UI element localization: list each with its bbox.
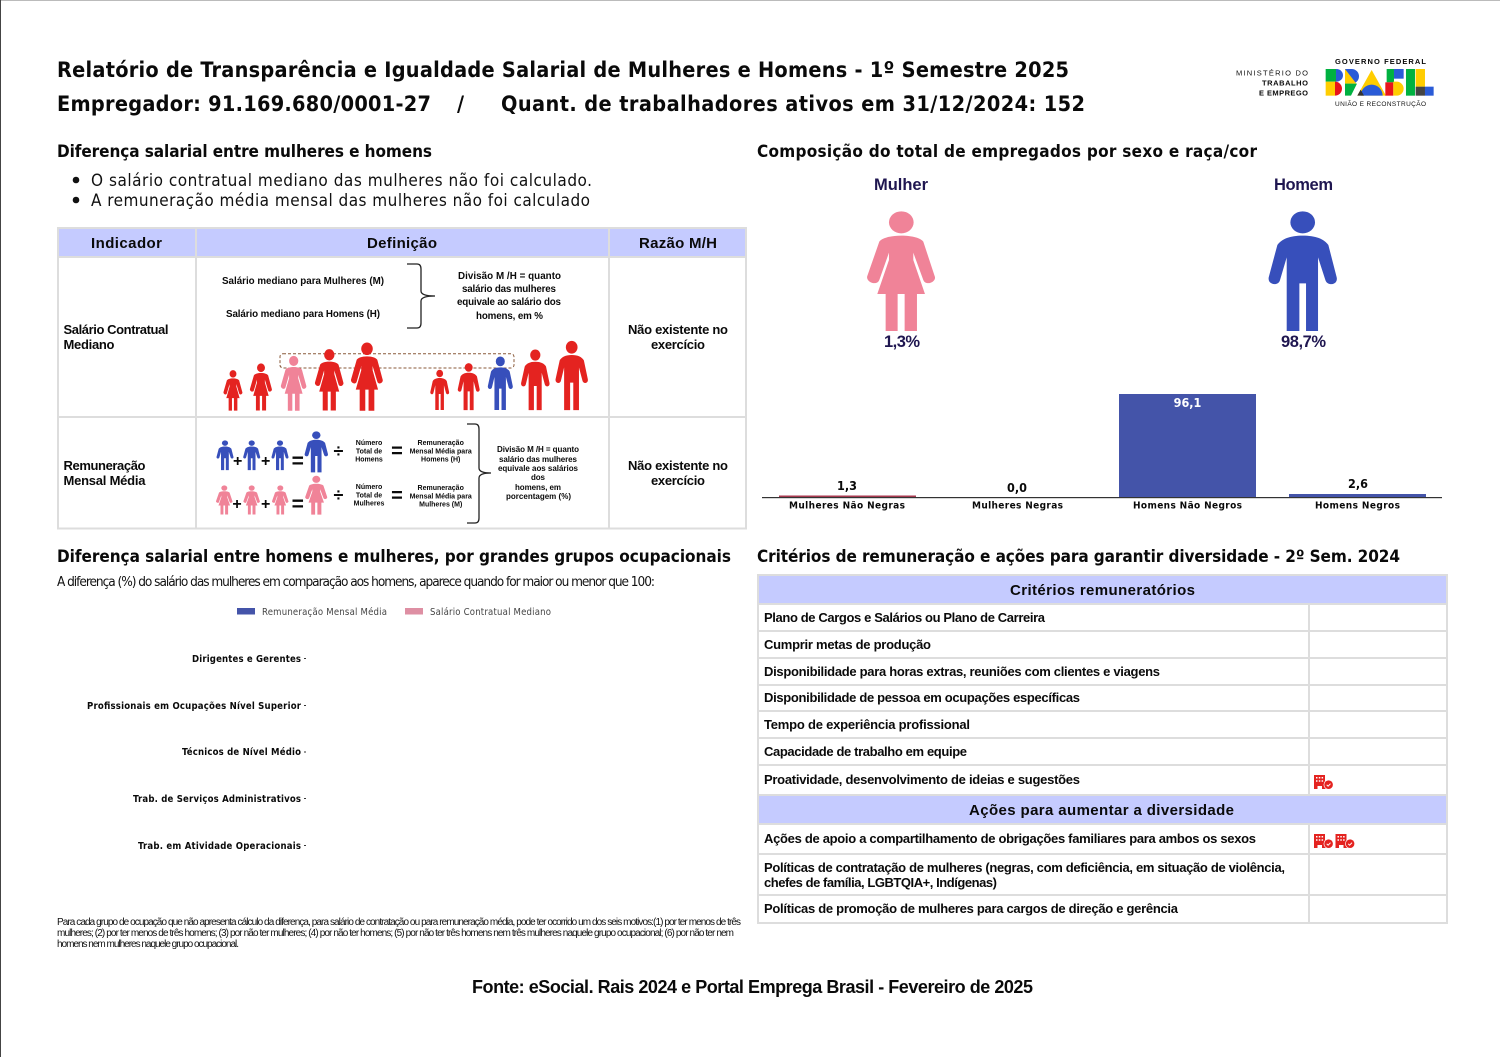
diagram: remuneração homens: Homens	[355, 456, 383, 464]
diagram: remuneração mulheres: Remuneração	[418, 485, 464, 492]
text block: nota de rodapé: Para cada grupo de ocupação que não apresenta cálculo da diferença, para salário de contratação ou para remuneração média, pode ter ocorrido um dos seis motivos:(1) por ter menos de três	[57, 917, 741, 928]
table header	[91, 235, 717, 252]
title: Relatório de Transparência e Igualdade Salarial de Mulheres e Homens - 1º Semestre 2025	[57, 58, 1069, 83]
table: ações para diversidade: Ações de apoio a compartilhamento de obrigações familiares para ambos os sexos	[764, 831, 1256, 846]
chart: categorias ocupacionais: Trab. em Atividade Operacionais	[138, 841, 301, 852]
bar chart: raça/cor: Homens Negros	[1315, 500, 1400, 512]
title: Quant. de trabalhadores ativos em 31/12/2024: 152	[501, 92, 1085, 117]
table header: Indicador	[91, 235, 162, 252]
definição: divisão M/H: equivale aos salários	[498, 464, 579, 473]
diagram: remuneração homens: +	[233, 453, 242, 470]
text block: nota de rodapé	[57, 917, 741, 950]
razão: remuneração	[628, 458, 728, 488]
figure: mulher 1,3%	[867, 176, 935, 351]
panel: composição por sexo e raça/cor	[757, 142, 1442, 512]
legend: Salário Contratual Mediano	[430, 607, 551, 618]
bar chart: raça/cor: Mulheres Não Negras	[789, 500, 905, 512]
definição: salário mediano: equivale ao salário dos	[457, 297, 562, 308]
razão: remuneração: Não existente no	[628, 458, 728, 473]
diagram: remuneração homens: =	[391, 440, 403, 462]
legend: Remuneração Mensal Média	[262, 607, 387, 618]
table: critérios remuneratórios: Cumprir metas de produção	[764, 637, 931, 652]
heading: diferença salarial: Diferença salarial entre mulheres e homens	[57, 142, 432, 162]
figure: mulher 1,3%: Mulher	[874, 176, 929, 194]
bar chart: raça/cor: 0,0	[1007, 480, 1027, 495]
figure: homem 98,7%	[1269, 176, 1337, 351]
icons: empresa com ação	[1314, 834, 1355, 849]
definição: salário mediano: Divisão M /H = quanto	[458, 271, 561, 282]
razão: salário contratual: Não existente no	[628, 322, 728, 337]
chart: categorias ocupacionais: Profissionais em Ocupações Nível Superior	[87, 701, 302, 712]
definição: divisão M/H: Divisão M /H = quanto	[497, 445, 579, 454]
definição: divisão M/H: porcentagem (%)	[506, 492, 571, 501]
row label: salário contratual mediano: Mediano	[64, 337, 115, 352]
title	[57, 58, 1085, 117]
chart: categorias ocupacionais: Técnicos de Nível Médio	[182, 747, 301, 758]
chart: categorias ocupacionais: Trab. de Serviços Administrativos	[133, 794, 301, 805]
chart: categorias ocupacionais	[87, 654, 306, 852]
figure: homem 98,7%: Homem	[1274, 176, 1333, 194]
panel: diferença salarial	[57, 142, 592, 211]
diagram: remuneração homens: Remuneração	[418, 440, 464, 447]
text block: bullets: A remuneração média mensal das mulheres não foi calculado	[91, 191, 590, 211]
diagram: remuneração homens: =	[292, 450, 304, 473]
text block: nota de rodapé: mulheres; (2) por ter menos de três homens; (3) por não ter mulheres; (4) por não ter homens; (5) por não ter três homens nem três mulheres naquele grupo ocupacional; (6) por não ter nem	[57, 928, 734, 939]
bar chart: raça/cor: Mulheres Negras	[972, 500, 1063, 512]
figure: mulher 1,3%: 1,3%	[884, 333, 920, 351]
table: critérios remuneratórios: Tempo de experiência profissional	[764, 717, 970, 732]
table header: Razão M/H	[639, 235, 717, 252]
diagram: remuneração mulheres: Número	[356, 484, 382, 491]
logo: ministério e governo federal: MINISTÉRIO DO	[1236, 68, 1308, 78]
panel: tabela de indicadores	[57, 228, 747, 528]
diagram: remuneração mulheres: ÷	[334, 485, 344, 505]
row label: remuneração mensal média: Remuneração	[64, 458, 146, 473]
table: ações para diversidade: Políticas de contratação de mulheres (negras, com deficiência, em situação de violência,	[764, 860, 1285, 875]
definição: salário mediano	[222, 264, 562, 328]
diagram: remuneração mulheres: +	[232, 496, 242, 513]
panel: diferença por grupos ocupacionais	[57, 547, 741, 950]
legend	[237, 607, 551, 618]
table: ações para diversidade: chefes de família, LGBTQIA+, Indígenas)	[764, 875, 997, 890]
figure: homem 98,7%: 98,7%	[1281, 333, 1326, 351]
heading: critérios: Critérios de remuneração e ações para garantir diversidade - 2º Sem. 2024	[757, 547, 1400, 567]
text block: bullets: O salário contratual mediano das mulheres não foi calculado.	[91, 171, 592, 191]
logo: ministério e governo federal: TRABALHO	[1262, 78, 1308, 88]
table: critérios remuneratórios: Plano de Cargos e Salários ou Plano de Carreira	[764, 610, 1046, 625]
diagram: remuneração mulheres	[216, 476, 472, 516]
diagram: remuneração homens: Número	[356, 440, 382, 447]
bar chart: raça/cor: 96,1	[1174, 395, 1202, 410]
text block: nota de rodapé: homens nem mulheres naquele grupo ocupacional.	[57, 939, 239, 950]
chart: categorias ocupacionais: Dirigentes e Gerentes	[192, 654, 301, 665]
panel: critérios e ações	[757, 547, 1448, 923]
bar chart: raça/cor	[762, 394, 1442, 512]
text block: bullets	[73, 171, 592, 211]
diagram: remuneração homens	[217, 431, 472, 473]
diagram: remuneração homens: Total de	[356, 448, 382, 455]
diagram: remuneração mulheres: =	[391, 485, 403, 507]
table: ações para diversidade	[764, 802, 1355, 916]
row label: salário contratual mediano: Salário Contratual	[64, 322, 168, 337]
diagram: remuneração mulheres: Mulheres (M)	[419, 502, 462, 508]
definição: salário mediano: homens, em %	[476, 311, 543, 322]
table header: Definição	[367, 235, 437, 252]
table: critérios remuneratórios: Disponibilidade de pessoa em ocupações específicas	[764, 690, 1080, 705]
text block: explicação: A diferença (%) do salário das mulheres em comparação aos homens, aparece quando for maior ou menor que 100:	[57, 574, 655, 590]
table: critérios remuneratórios: Disponibilidade para horas extras, reuniões com clientes e viagens	[764, 664, 1160, 679]
definição: divisão M/H: homens, em	[515, 483, 561, 492]
title: /	[457, 92, 465, 117]
diagram: remuneração mulheres: +	[261, 496, 270, 513]
footer: fonte: Fonte: eSocial. Rais 2024 e Portal Emprega Brasil - Fevereiro de 2025	[472, 977, 1033, 997]
diagram: remuneração homens: ÷	[334, 441, 344, 461]
razão: salário contratual: exercício	[651, 337, 705, 352]
heading: composição: Composição do total de empregados por sexo e raça/cor	[757, 142, 1257, 162]
diagram: remuneração homens: Homens (H)	[421, 456, 460, 464]
diagram: mediana de pessoas	[223, 341, 588, 411]
logo: ministério e governo federal	[1236, 57, 1434, 108]
bar chart: raça/cor: Homens Não Negros	[1133, 500, 1242, 512]
heading: grupos ocupacionais: Diferença salarial entre homens e mulheres, por grandes grupos ocupacionais	[57, 547, 731, 567]
row label: remuneração mensal média: Mensal Média	[64, 473, 146, 488]
bar chart: raça/cor: 1,3	[837, 478, 857, 493]
table: ações para diversidade: Ações para aumentar a diversidade	[969, 802, 1234, 819]
definição: salário mediano: Salário mediano para Mulheres (M)	[222, 276, 384, 287]
diagram: remuneração mulheres: Mulheres	[354, 500, 384, 508]
table: critérios remuneratórios: Proatividade, desenvolvimento de ideias e sugestões	[764, 772, 1080, 787]
table: critérios remuneratórios: Critérios remuneratórios	[1010, 582, 1195, 599]
diagram: remuneração homens: +	[261, 453, 270, 470]
diagram: remuneração mulheres: =	[292, 493, 304, 516]
definição: divisão M/H	[467, 424, 579, 523]
diagram: remuneração mulheres: Total de	[356, 492, 382, 499]
table: ações para diversidade: Políticas de promoção de mulheres para cargos de direção e gerência	[764, 901, 1179, 916]
bar chart: raça/cor: 2,6	[1348, 476, 1368, 491]
diagram: remuneração mulheres: Mensal Média para	[410, 493, 472, 500]
razão: salário contratual	[628, 322, 728, 352]
logo: ministério e governo federal: E EMPREGO	[1259, 88, 1308, 98]
row label: remuneração mensal média	[64, 458, 146, 488]
razão: remuneração: exercício	[651, 473, 705, 488]
definição: salário mediano: salário das mulheres	[462, 284, 557, 295]
logo: ministério e governo federal: GOVERNO FEDERAL	[1335, 57, 1426, 66]
table: critérios remuneratórios	[757, 575, 1448, 923]
definição: salário mediano: Salário mediano para Homens (H)	[226, 309, 380, 320]
definição: divisão M/H: dos	[531, 473, 546, 482]
definição: divisão M/H: salário das mulheres	[499, 455, 578, 464]
logo: ministério e governo federal: UNIÃO E RECONSTRUÇÃO	[1335, 99, 1426, 108]
title: Empregador: 91.169.680/0001-27	[57, 92, 431, 117]
table: critérios remuneratórios: Capacidade de trabalho em equipe	[764, 744, 967, 759]
icon: empresa com critério	[1314, 775, 1334, 790]
diagram: remuneração homens: Mensal Média para	[410, 448, 472, 455]
row label: salário contratual mediano	[64, 322, 168, 352]
